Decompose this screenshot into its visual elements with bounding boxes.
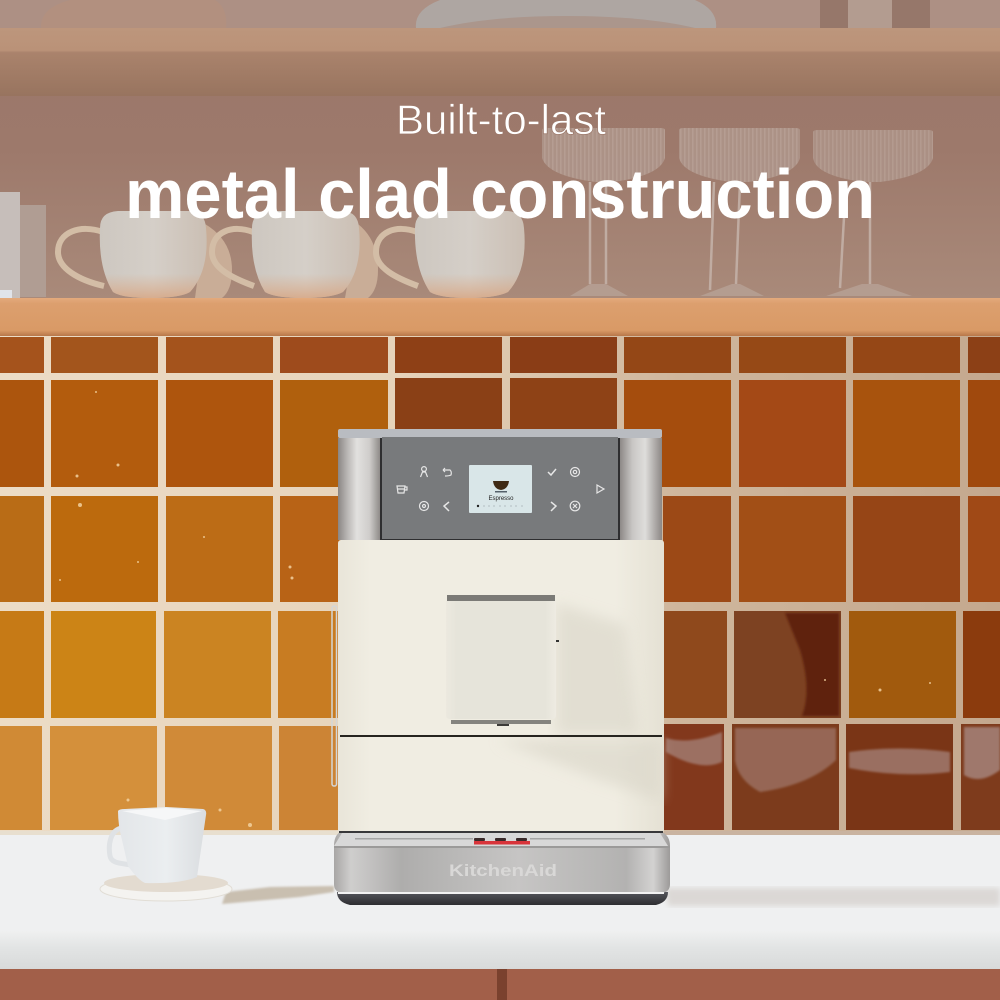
title line 2: metal clad construction [125, 155, 875, 233]
icon: play [597, 485, 604, 493]
lower wooden shelf [0, 298, 1000, 336]
tile row 2 [0, 379, 1000, 486]
icon: check [548, 469, 556, 475]
saucer [100, 877, 232, 901]
coupe glasses [542, 128, 933, 296]
icon: cup [397, 486, 407, 493]
mug 1 [58, 211, 232, 298]
control panel [380, 437, 620, 540]
icon: back arrow [443, 468, 451, 476]
display screen: Espresso [488, 496, 514, 502]
tile glaze glare [666, 727, 1000, 792]
machine handle [332, 606, 336, 786]
white cup and saucer [100, 807, 232, 901]
right metal column [620, 438, 662, 540]
coffee machine [332, 429, 670, 905]
top wall tint [0, 0, 1000, 28]
glass tumblers on left [0, 192, 46, 298]
dark glaze streak [785, 613, 839, 716]
cup handle [109, 828, 142, 868]
drip tray base [334, 831, 670, 905]
cup body [118, 807, 206, 883]
glass 3 [813, 130, 933, 296]
tile backsplash [0, 336, 1000, 836]
mug 3 [376, 211, 525, 298]
tile speckles [59, 391, 931, 827]
countertop [0, 831, 1000, 969]
brand wordmark: KitchenAid [449, 861, 557, 880]
spout shadow on body [497, 603, 660, 800]
title line 1: Built-to-last [396, 96, 606, 143]
icon: settings [570, 468, 580, 476]
tile row 3 [0, 497, 1000, 601]
glass 1 [542, 128, 665, 296]
top wooden shelf [0, 28, 1000, 96]
title [125, 96, 875, 233]
red indicator [474, 841, 530, 844]
coffee spout [446, 595, 559, 726]
ceramic mugs [58, 211, 525, 298]
control icons [397, 467, 604, 511]
plates and jar on top shelf [41, 0, 930, 28]
upper wall background [0, 0, 1000, 300]
left metal column [338, 438, 380, 540]
cream body [338, 540, 664, 833]
icon: right chevron [551, 502, 556, 511]
glass 2 [679, 128, 800, 296]
lower cabinets [0, 969, 1000, 1000]
icon: left chevron [444, 502, 449, 511]
tile row 4 [0, 612, 1000, 717]
tile row 5 [0, 725, 1000, 830]
counter shadows [222, 886, 1000, 906]
mug 2 [212, 211, 378, 298]
icon: person [420, 467, 428, 477]
tile row 1 [0, 337, 1000, 372]
icon: coffee strength [420, 502, 428, 510]
seam [340, 735, 662, 737]
icon: cancel [570, 501, 580, 511]
display screen [469, 465, 532, 513]
top cap [338, 429, 662, 438]
